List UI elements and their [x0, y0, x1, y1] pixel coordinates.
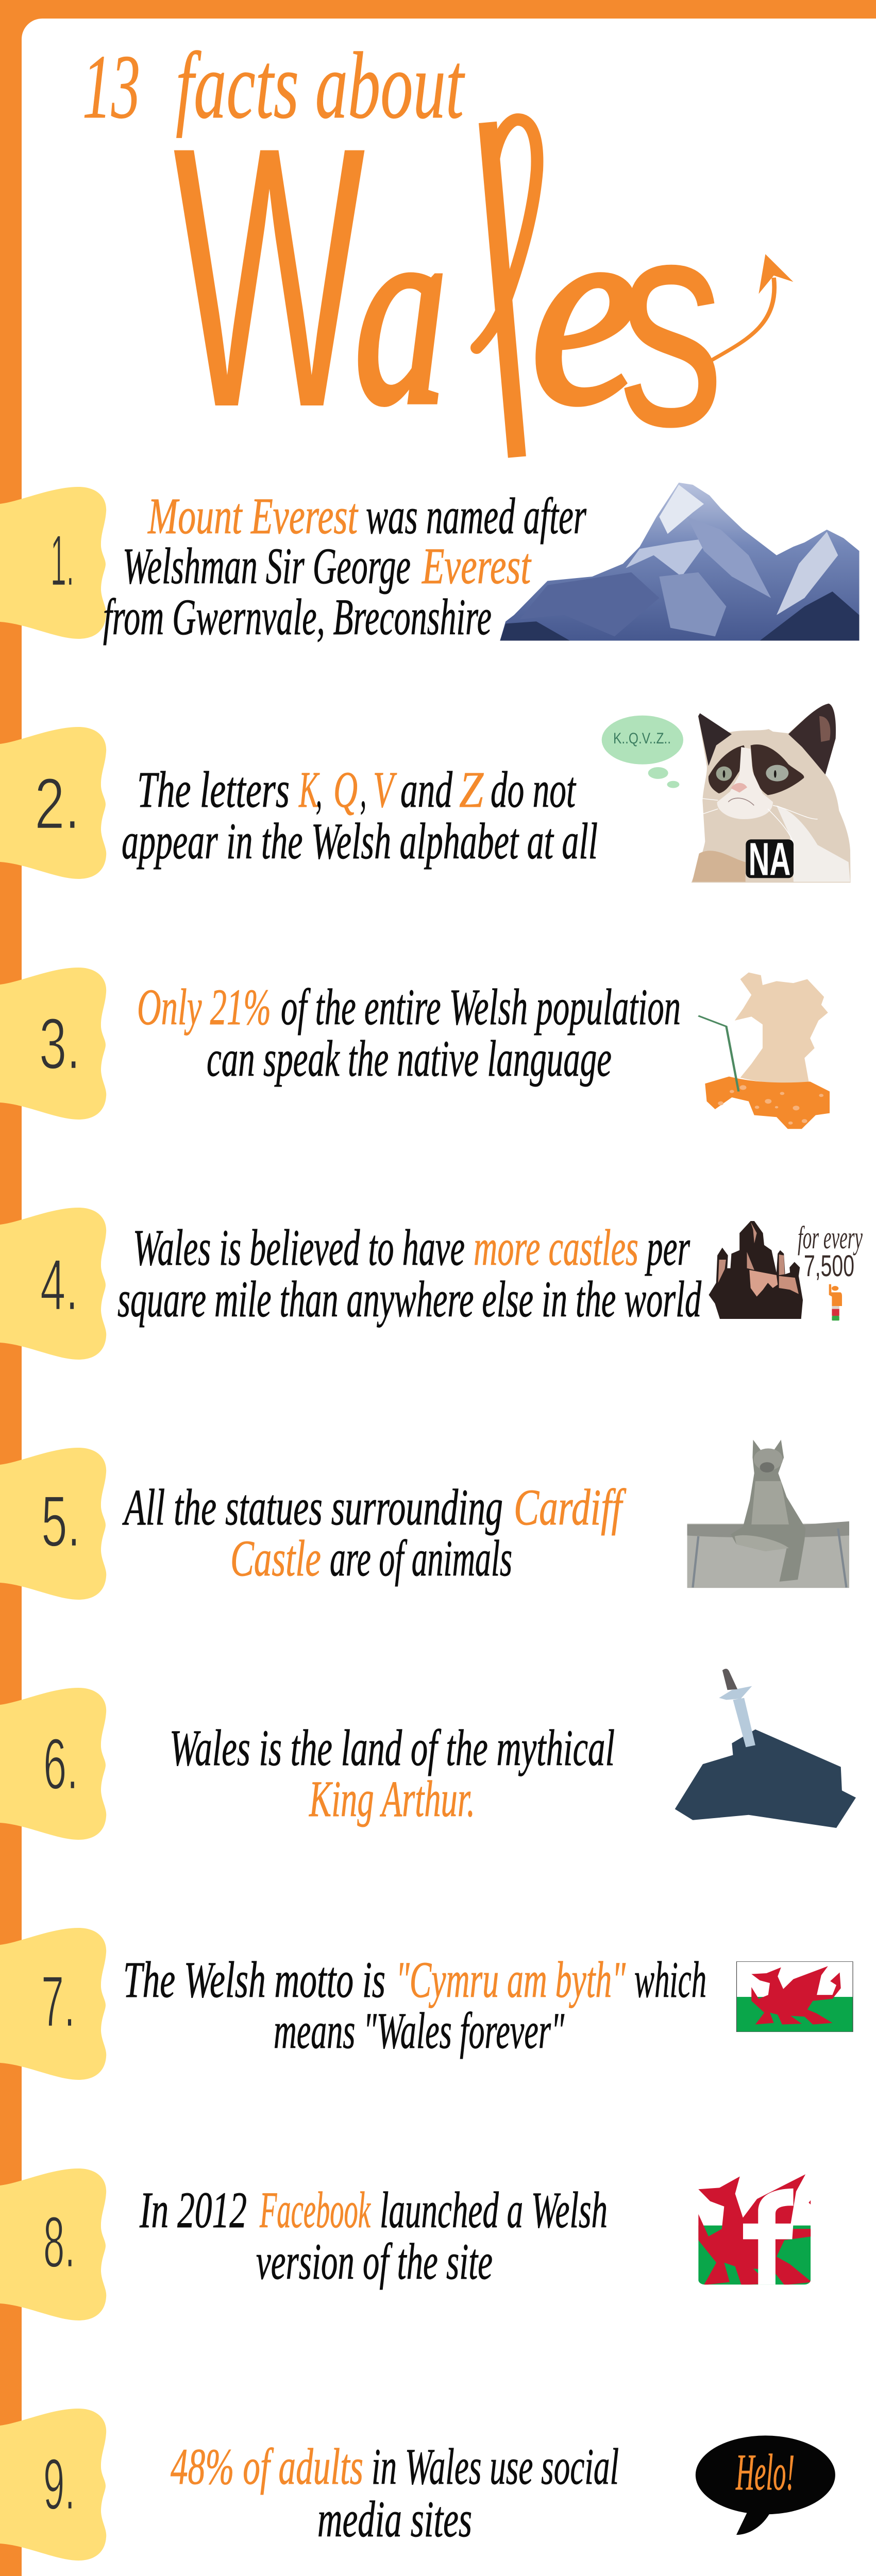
fact 2 text: K [298, 761, 319, 818]
fact 4 text: per [645, 1219, 690, 1276]
icon: person [829, 1284, 842, 1320]
fact 3 text [137, 978, 681, 1087]
number tab 2: 2. [35, 763, 80, 844]
title: Wales: l [458, 37, 548, 557]
fact 5 text: Cardiff [514, 1479, 627, 1536]
fact 3 text: Only 21% [137, 978, 271, 1036]
icon: mountain [500, 483, 859, 641]
fact 4 [0, 1208, 863, 1360]
arrow tail on the s [707, 254, 794, 363]
title: Wales [173, 37, 794, 557]
number tab 3: 3. [39, 1003, 80, 1084]
fact 1 text: was named after [366, 487, 587, 545]
number tab 1: 1. [50, 520, 74, 601]
fact 2 text: Q [333, 761, 358, 818]
icon: speech bubble: Helo! [735, 2444, 795, 2501]
fact 6 text: Wales is the land of the mythical [170, 1719, 615, 1776]
fact 4 text: more castles [474, 1219, 638, 1276]
title: Wales: e [531, 163, 638, 460]
fact 9 [0, 2409, 835, 2561]
fact 2 text: appear in the Welsh alphabet at all [122, 812, 598, 870]
number tab 7: 7. [41, 1961, 75, 2042]
NA label: NA [749, 834, 790, 885]
number tab 8 [0, 2168, 106, 2320]
fact 5 text [122, 1479, 627, 1587]
fact 5 text: are of animals [330, 1530, 512, 1587]
number tab 3 [0, 968, 106, 1120]
title: Wales: s [618, 155, 724, 489]
title: 13 facts about: 13 [82, 36, 140, 138]
title: 13 facts about [82, 33, 465, 139]
number tab 2 [0, 727, 106, 879]
for every 7,500 label [798, 1221, 863, 1283]
icon: castle [709, 1221, 803, 1319]
title: Wales: W [173, 70, 367, 485]
fact 1 text: Mount Everest [147, 487, 359, 545]
NA label [746, 834, 794, 885]
fact 9 text: in Wales use social [372, 2438, 619, 2495]
number tab 4 [0, 1208, 106, 1360]
icon: Welsh flag [737, 1961, 853, 2032]
number tab 1 [0, 487, 106, 639]
number tab 7 [0, 1928, 106, 2080]
fact 6 text: King Arthur. [309, 1770, 475, 1827]
fact 4 text: Wales is believed to have [133, 1219, 465, 1276]
fact 1 text: Welshman Sir George [123, 537, 411, 595]
title: Wales: a [355, 162, 447, 460]
icon: map of Wales with straw [698, 973, 830, 1129]
fact 7 text [123, 1951, 706, 2059]
fact 6 text [170, 1719, 615, 1827]
fact 2 text: V [373, 761, 397, 818]
number tab 9 [0, 2409, 106, 2561]
icon: thought bubble [602, 716, 683, 788]
fact 2 text: , [316, 761, 322, 818]
fact 7 text: means "Wales forever" [274, 2002, 565, 2059]
fact 2 text: and [400, 761, 453, 818]
number tab 5 [0, 1448, 106, 1600]
fact 2 [0, 704, 851, 885]
fact 8 text: version of the site [256, 2233, 493, 2290]
fact 2 text [122, 761, 598, 870]
fact 8 [0, 2168, 823, 2320]
fact 5 [0, 1440, 849, 1600]
icon: animal statue [687, 1440, 849, 1588]
fact 9 text: media sites [317, 2490, 472, 2548]
number tab 4: 4. [40, 1244, 78, 1325]
fact 4 text [117, 1219, 702, 1328]
fact 8 text: In 2012 [139, 2181, 247, 2239]
fact 3 [0, 968, 830, 1129]
icon: speech bubble [696, 2435, 835, 2535]
fact 9 text: 48% of adults [171, 2438, 363, 2495]
icon: grumpy cat [692, 704, 851, 885]
flourish on the l [477, 120, 537, 348]
icon: Facebook logo in Welsh flag [698, 2174, 811, 2284]
fact 1 [0, 483, 859, 646]
fact 2 text: The letters [137, 761, 290, 818]
fact 8 text: Facebook [259, 2181, 371, 2239]
fact 1 text [103, 487, 587, 646]
fact 7 text: The Welsh motto is [123, 1951, 385, 2008]
title: 13 facts about: facts about [176, 33, 465, 139]
number tab 9: 9. [43, 2444, 75, 2524]
number tab 8: 8. [43, 2201, 75, 2282]
icon: sword in the stone [675, 1669, 856, 1828]
fact 3 text: can speak the native language [207, 1030, 612, 1087]
fact 7 text: which [634, 1951, 706, 2008]
fact 7 text: "Cymru am byth" [396, 1951, 626, 2008]
icon: thought bubble: K..Q.V..Z.. [613, 730, 671, 747]
fact 8 text [139, 2181, 608, 2290]
number tab 6: 6. [43, 1723, 78, 1804]
fact 2 text: do not [491, 761, 576, 818]
fact 1 text: from Gwernvale, Breconshire [103, 588, 492, 646]
fact 2 text: , [360, 761, 366, 818]
fact 6 [0, 1669, 856, 1840]
fact 9 text [171, 2438, 619, 2548]
fact 7 [0, 1928, 853, 2080]
fact 2 text: Z [459, 761, 484, 818]
fact 5 text: Castle [230, 1530, 321, 1587]
fact 1 text: Everest [422, 537, 532, 595]
fact 8 text: launched a Welsh [380, 2181, 608, 2239]
fact 5 text: All the statues surrounding [122, 1479, 503, 1536]
number tab 5: 5. [41, 1481, 80, 1562]
number tab 6 [0, 1688, 106, 1840]
